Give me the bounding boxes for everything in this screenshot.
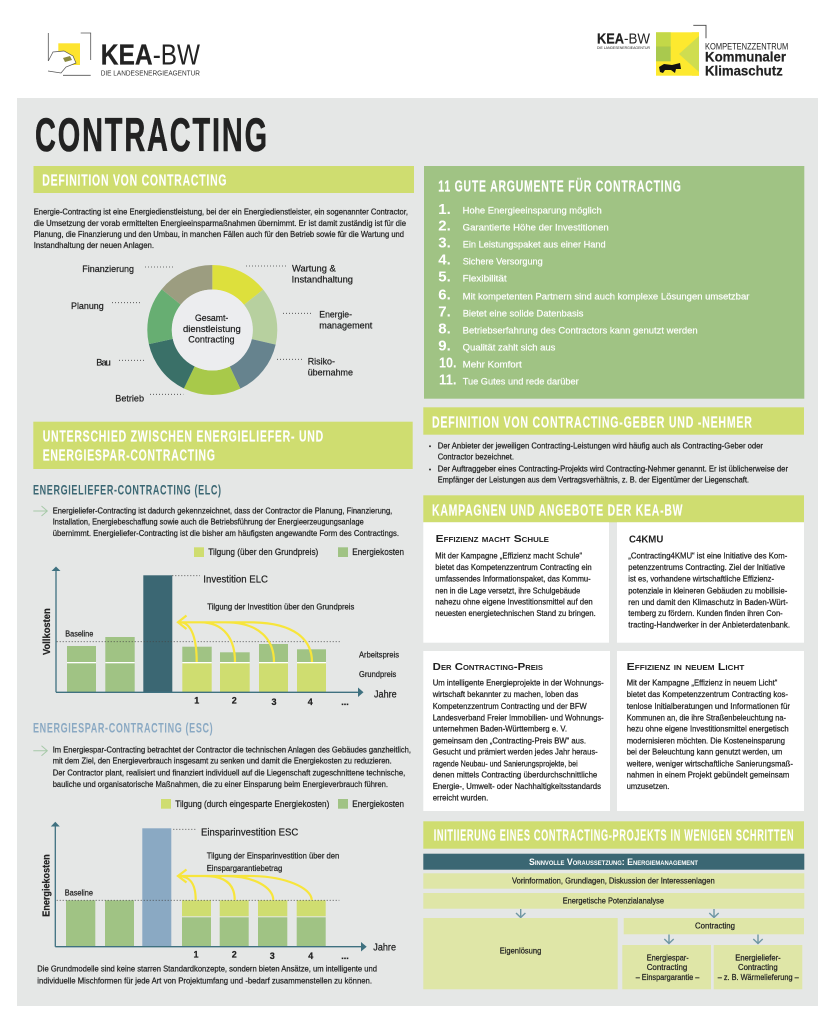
subheading: ELC: ENERGIELIEFER-CONTRACTING (ELC) <box>33 482 222 498</box>
card: Der Contracting-Preis: Gesucht und prämiert werden jedes Jahr heraus- <box>433 748 598 757</box>
text block: ELC description: übernimmt. Energieliefer-Contracting ist die bisher am häufigsten angewandte Form des Contractings. <box>53 529 399 538</box>
chart: ELC bars: Tilgung der Investition über den Grundpreis <box>207 602 354 611</box>
logo: Kompetenzzentrum Kommunaler Klimaschutz: Klimaschutz <box>705 62 783 78</box>
panel: Definition Contracting-Geber und -Nehmer: Empfänger der Leistungen aus dem Vertragsverhältnis, z. B. der Eigentümer der Liegenschaft. <box>438 476 749 485</box>
card: Der Contracting-Preis: Landesverband Freier Immobilien- und Wohnungs- <box>433 713 604 722</box>
panel: 11 gute Argumente: 6. <box>438 286 451 304</box>
legend: ELC: Energiekosten <box>352 547 404 557</box>
card: Effizienz macht Schule <box>423 522 609 643</box>
step: Energieliefer-Contracting: – z. B. Wärmelieferung – <box>718 973 799 982</box>
step: Energieliefer-Contracting: Contracting <box>738 963 778 972</box>
panel: 11 gute Argumente: Bietet eine solide Datenbasis <box>463 308 584 319</box>
step: Energiespar-Contracting: Energiespar- <box>647 954 689 963</box>
card: Effizienz in neuem Licht: nahmen in einem Projekt gebündelt gemeinsam <box>627 770 789 779</box>
card: Effizienz macht Schule: bietet das Kompetenzzentrum Contracting ein <box>435 563 592 572</box>
card: Effizienz in neuem Licht: Mit der Kampagne „Effizienz in neuem Licht“ <box>627 679 778 688</box>
logo: Kompetenzzentrum Kommunaler Klimaschutz: Kommunaler <box>705 49 787 65</box>
card: C4KMU: „Contracting4KMU“ ist eine Initiative des Kom- <box>628 552 788 561</box>
subheading: ESC: ENERGIESPAR-CONTRACTING (ESC) <box>33 720 213 736</box>
heading: Unterschied Energieliefer- und Energiespar-Contracting <box>33 422 413 469</box>
heading: Definition von Contracting <box>34 166 414 193</box>
chart: donut Gesamtdienstleistung Contracting: Risiko- <box>308 357 335 367</box>
card: C4KMU: C4KMU <box>629 534 663 546</box>
chart: ELC bars: Grundpreis <box>359 670 396 679</box>
card: Der Contracting-Preis: wirtschaft bekannter zu machen, loben das <box>432 690 578 699</box>
text block: ESC description: Der Contractor plant, realisiert und finanziert individuell auf die Liegenschaft zugeschnittene technische, <box>53 769 405 778</box>
logo: Kompetenzzentrum Kommunaler Klimaschutz: DIE LANDESENERGIEAGENTUR <box>597 46 650 50</box>
arrows: flow <box>516 909 763 944</box>
chart: ELC bars: 2 <box>232 695 237 705</box>
logo: Kompetenzzentrum Kommunaler Klimaschutz: KOMPETENZZENTRUM <box>705 41 788 52</box>
logo: Kompetenzzentrum Kommunaler Klimaschutz <box>597 25 788 78</box>
legend: ESC: Energiekosten <box>352 799 404 809</box>
panel: 11 gute Argumente: Ein Leistungspaket aus einer Hand <box>463 239 606 250</box>
section: ESC <box>33 720 411 985</box>
card: Effizienz in neuem Licht: bietet das Kompetenzzentrum Contracting kos- <box>627 690 788 699</box>
panel: 11 gute Argumente: Mit kompetenten Partnern sind auch komplexe Lösungen umsetzbar <box>463 291 749 302</box>
panel: 11 gute Argumente: Betriebserfahrung des Contractors kann genutzt werden <box>463 325 698 336</box>
text block: definition: Instandhaltung der neuen Anlagen. <box>34 241 154 250</box>
card: Effizienz macht Schule: nen in die Lage versetzt, ihre Schulgebäude <box>435 586 581 595</box>
text block: closing note: Die Grundmodelle sind keine starren Standardkonzepte, sondern bieten Ansätze, um intelligente und <box>37 965 377 974</box>
panel: 11 gute Argumente: Garantierte Höhe der Investitionen <box>463 222 609 233</box>
chart: ELC bars: Arbeitspreis <box>359 651 399 660</box>
panel: 11 gute Argumente: 7. <box>438 304 451 320</box>
text block: ELC description <box>53 506 399 538</box>
chart: donut Gesamtdienstleistung Contracting: Contracting <box>188 335 235 345</box>
step: Potenzialanalyse: Energetische Potenzialanalyse <box>563 897 664 906</box>
chart: ELC bars: ... <box>341 697 349 707</box>
chart: donut Gesamtdienstleistung Contracting: Finanzierung <box>82 264 134 274</box>
chart: ESC bars: Baseline <box>65 889 93 898</box>
chart: ESC bars: ... <box>341 951 349 961</box>
legend: ELC: Tilgung (über den Grundpreis) <box>208 547 318 557</box>
legend: ESC: Tilgung (durch eingesparte Energiekosten) <box>175 799 329 809</box>
card: Der Contracting-Preis: Der Contracting-Preis <box>433 661 543 673</box>
step: Energiespar-Contracting: Contracting <box>647 963 688 972</box>
text block: ELC description: Installation, Energiebeschaffung sowie auch die Betriebsführung der Energieerzeugungsanlage <box>53 517 364 526</box>
step: Vorinformation <box>423 873 804 889</box>
panel: 11 gute Argumente: 11 GUTE ARGUMENTE FÜR CONTRACTING <box>438 177 682 196</box>
card: Effizienz macht Schule: Mit der Kampagne „Effizienz macht Schule“ <box>435 552 582 561</box>
step: Energieliefer-Contracting <box>714 945 802 989</box>
chart: ELC bars: Investition ELC <box>203 574 268 586</box>
card: Effizienz in neuem Licht: umzusetzen. <box>627 782 669 791</box>
chart: ELC bars: 1 <box>194 695 199 705</box>
chart: ESC bars: Einspargarantiebetrag <box>207 864 283 873</box>
chart: donut Gesamtdienstleistung Contracting: Betrieb <box>115 394 144 404</box>
step: Contracting <box>624 918 804 934</box>
card: Effizienz in neuem Licht: bei der Beleuchtung kann genutzt werden, um <box>627 748 782 757</box>
panel: 11 gute Argumente: 8. <box>438 320 451 338</box>
chart: donut Gesamtdienstleistung Contracting: management <box>319 321 373 331</box>
card: C4KMU: potenziale in kleineren Gebäuden zu mobilisie- <box>628 586 788 595</box>
text block: ESC description: mit dem Ziel, den Energieverbrauch insgesamt zu senken und damit die Energiekosten zu reduzieren. <box>53 757 392 766</box>
chart: ELC bars: Jahre <box>374 689 397 700</box>
card: C4KMU: ist es, vorhandene wirtschaftliche Effizienz- <box>628 575 774 584</box>
text block: definition: Energie-Contracting ist eine Energiedienstleistung, bei der ein Energiedienstleister, ein sogenannter Contractor, <box>34 208 408 216</box>
icon: arrow ESC <box>33 746 47 756</box>
text block: ESC description <box>53 746 411 789</box>
chart: donut Gesamtdienstleistung Contracting: Instandhaltung <box>292 275 353 285</box>
card: Effizienz in neuem Licht: tenlose Initialberatungen und Informationen für <box>627 702 790 711</box>
card: Der Contracting-Preis <box>423 651 610 811</box>
chart: donut Gesamtdienstleistung Contracting: übernahme <box>308 368 353 378</box>
card: Effizienz in neuem Licht: hezu ohne eigene Investitionsmittel energetisch <box>627 725 789 734</box>
card: Effizienz in neuem Licht: Effizienz in neuem Licht <box>627 661 745 673</box>
step: Energieliefer-Contracting: Energieliefer- <box>735 954 781 963</box>
heading: Unterschied Energieliefer- und Energiespar-Contracting: ENERGIESPAR-CONTRACTING <box>43 448 216 465</box>
card: Effizienz macht Schule: Effizienz macht Schule <box>436 533 549 545</box>
card: C4KMU <box>617 522 804 643</box>
card: Effizienz macht Schule: umfassendes Informationspaket, das Kommu- <box>435 575 591 584</box>
panel: 11 gute Argumente <box>424 166 804 399</box>
chart: donut Gesamtdienstleistung Contracting: Bau <box>96 358 111 368</box>
section: ELC <box>33 482 404 707</box>
card: Der Contracting-Preis: Energie-, Umwelt- oder Nachhaltigkeitsstandards <box>433 782 601 791</box>
panel: Definition Contracting-Geber und -Nehmer: Contractor bezeichnet. <box>438 452 514 461</box>
chart: ESC bars <box>41 822 396 961</box>
text block: ELC description: Energieliefer-Contracting ist dadurch gekennzeichnet, dass der Contractor die Planung, Finanzierung, <box>53 506 392 515</box>
panel: 11 gute Argumente: 2. <box>438 218 451 235</box>
chart: donut Gesamtdienstleistung Contracting: Gesamt- <box>195 313 228 323</box>
card: Der Contracting-Preis: denen mittels Contracting überdurchschnittliche <box>433 770 598 779</box>
card: C4KMU: tracting-Handwerker in der Anbieterdatenbank. <box>628 621 790 630</box>
logo: Kompetenzzentrum Kommunaler Klimaschutz: -BW <box>624 31 650 47</box>
card: Der Contracting-Preis: Kompetenzzentrum Contracting und der BFW <box>433 702 587 711</box>
chart: ESC bars: 4 <box>308 951 313 961</box>
card: C4KMU: ren und damit den Klimaschutz in Baden-Würt- <box>628 598 788 607</box>
panel: Kampagnen und Angebote <box>423 495 804 811</box>
panel: 11 gute Argumente: Qualität zahlt sich aus <box>463 342 556 353</box>
panel: definition of contracting <box>34 166 414 404</box>
chart: ESC bars: Einsparinvestition ESC <box>201 827 299 839</box>
card: Effizienz macht Schule: nahezu ohne eigene Investitionsmittel auf den <box>435 597 593 606</box>
chart: ESC bars: Jahre <box>373 942 396 953</box>
chart: ELC bars <box>42 566 399 707</box>
card: Effizienz in neuem Licht <box>617 651 804 811</box>
chart: ESC bars: 1 <box>193 950 199 960</box>
chart: ELC bars: 3 <box>271 697 277 707</box>
step: Contracting: Contracting <box>695 922 735 931</box>
step: Sinnvolle Voraussetzung: Sinnvolle Voraussetzung: Energiemanagement <box>529 857 698 867</box>
step: Energiespar-Contracting: – Einspargarantie – <box>636 973 700 982</box>
step: Energiespar-Contracting <box>622 945 711 989</box>
step: Eigenlösung <box>423 918 618 989</box>
card: C4KMU: temberg zu fördern. Kunden finden ihren Con- <box>628 609 783 618</box>
logo: KEA-BW <box>48 33 201 77</box>
text block: ESC description: bauliche und organisatorische Maßnahmen, die zu einer Einsparung beim Energieverbrauch führen. <box>53 780 388 789</box>
chart: ESC bars: 2 <box>232 950 237 960</box>
panel: 11 gute Argumente: 10. <box>439 355 456 372</box>
chart: donut Gesamtdienstleistung Contracting: Energie- <box>319 310 352 320</box>
step: Potenzialanalyse <box>423 893 804 909</box>
panel: 11 gute Argumente: Mehr Komfort <box>463 359 522 370</box>
card: Der Contracting-Preis: ragende Neubau- und Sanierungsprojekte, bei <box>433 759 578 768</box>
chart: ELC bars: Vollkosten <box>42 608 53 655</box>
chart: donut Gesamtdienstleistung Contracting <box>71 264 373 404</box>
panel: Definition Contracting-Geber und -Nehmer: Der Anbieter der jeweiligen Contracting-Leistungen wird häufig auch als Contracting-Geber oder <box>438 442 763 451</box>
panel: 11 gute Argumente: Hohe Energieeinsparung möglich <box>463 205 602 216</box>
chart: donut Gesamtdienstleistung Contracting: Wartung & <box>292 264 336 274</box>
panel: Definition Contracting-Geber und -Nehmer <box>423 407 804 485</box>
heading: Definition von Contracting: DEFINITION VON CONTRACTING <box>42 172 227 190</box>
chart: ELC bars: Baseline <box>65 630 94 639</box>
card: Der Contracting-Preis: Um intelligente Energieprojekte in der Wohnungs- <box>433 679 604 688</box>
text block: definition: die Umsetzung der vorab ermittelten Energieeinsparmaßnahmen übernimmt. Er ist damit zuständig ist für die <box>34 219 406 228</box>
text block: closing note <box>37 965 377 985</box>
card: Der Contracting-Preis: gemeinsam den „Contracting-Preis BW“ aus. <box>433 736 586 745</box>
panel: 11 gute Argumente: Tue Gutes und rede darüber <box>463 376 579 387</box>
card: Effizienz in neuem Licht: modernisieren möchten. Die Kosteneinsparung <box>627 736 785 745</box>
chart: ESC bars: 3 <box>270 951 275 961</box>
panel: 11 gute Argumente: 9. <box>438 338 451 354</box>
panel: 11 gute Argumente: 11. <box>439 372 456 389</box>
panel: Kampagnen und Angebote: KAMPAGNEN UND ANGEBOTE DER KEA-BW <box>432 503 683 520</box>
chart: donut Gesamtdienstleistung Contracting: dienstleistung <box>183 324 241 334</box>
logo: KEA-BW: DIE LANDESENERGIEAGENTUR <box>101 70 200 77</box>
heading: Unterschied Energieliefer- und Energiespar-Contracting: UNTERSCHIED ZWISCHEN ENERGIELIEFER- UND <box>43 429 324 446</box>
text block: ESC description: Im Energiespar-Contracting betrachtet der Contractor die technischen Anlagen des Gebäudes ganzheitlich, <box>53 746 411 755</box>
step: Sinnvolle Voraussetzung <box>423 854 804 870</box>
card: Effizienz in neuem Licht: Kommunen an, die ihre Straßenbeleuchtung na- <box>627 713 786 722</box>
chart: ESC bars: Energiekosten <box>41 854 52 917</box>
panel: 11 gute Argumente: 5. <box>438 268 451 286</box>
panel: Definition Contracting-Geber und -Nehmer: Der Auftraggeber eines Contracting-Projekts wird Contracting-Nehmer genannt. Er ist üblicherweise der <box>438 465 788 474</box>
text block: definition: Planung, die Finanzierung und den Umbau, in manchen Fällen auch für den Betrieb sowie für die Wartung und <box>34 230 404 239</box>
card: Der Contracting-Preis: unternehmen Baden-Württemberg e. V. <box>433 725 567 734</box>
step: Eigenlösung: Eigenlösung <box>500 947 542 956</box>
chart: ESC bars: Tilgung der Einsparinvestition über den <box>207 852 340 861</box>
panel: 11 gute Argumente: 4. <box>438 252 451 268</box>
logo: KEA-BW: KEA <box>101 39 153 71</box>
chart: ELC bars: 4 <box>308 697 313 707</box>
panel: 11 gute Argumente: 1. <box>438 201 451 218</box>
card: Effizienz macht Schule: neuesten energietechnischen Stand zu bringen. <box>435 609 596 618</box>
panel: 11 gute Argumente: Sichere Versorgung <box>463 256 543 267</box>
text block: definition <box>34 208 408 250</box>
card: C4KMU: petenzzentrums Contracting. Ziel der Initiative <box>628 563 785 572</box>
title: CONTRACTING <box>35 108 269 161</box>
card: Effizienz in neuem Licht: weitere, weniger wirtschaftliche Sanierungsmaß- <box>626 759 793 768</box>
panel: Initiierung eines Contracting-Projekts <box>423 821 804 989</box>
card: Der Contracting-Preis: erreicht wurden. <box>433 793 488 802</box>
panel: 11 gute Argumente: 3. <box>438 235 451 252</box>
step: Vorinformation: Vorinformation, Grundlagen, Diskussion der Interessenlagen <box>512 877 715 886</box>
logo: KEA-BW: -BW <box>153 39 201 71</box>
chart: donut Gesamtdienstleistung Contracting: Planung <box>71 301 104 311</box>
icon: arrow ELC <box>33 506 47 516</box>
text block: closing note: individuelle Mischformen für jede Art von Projektumfang und -bedarf zusammenstellen zu können. <box>37 976 372 985</box>
legend: ELC <box>194 547 404 557</box>
panel: 11 gute Argumente: Flexibilität <box>463 273 507 284</box>
logo: Kompetenzzentrum Kommunaler Klimaschutz: KEA <box>597 31 624 47</box>
